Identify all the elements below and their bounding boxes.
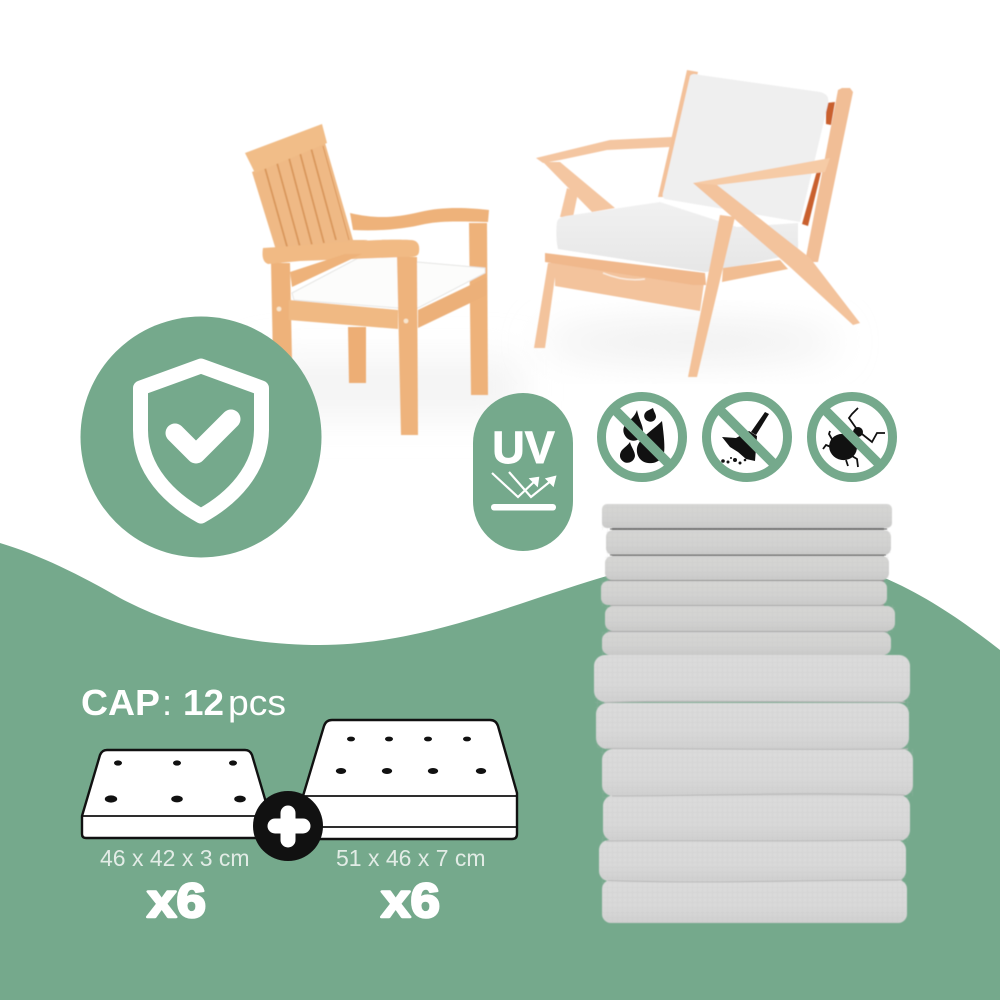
icon: no insects: [812, 396, 892, 478]
tufting dots: [336, 737, 486, 774]
size label right: 51 x 46 x 7 cm: [336, 845, 486, 871]
near armrest: [263, 240, 419, 264]
UV protection badge: [473, 393, 573, 551]
far armrest: [350, 208, 489, 230]
chair: teak armchair with white seat pad: [245, 124, 489, 435]
thick cushions: [594, 655, 913, 923]
back legs and rear posts: [271, 223, 488, 395]
icon: no water: [602, 396, 682, 478]
UV text: UV: [492, 422, 555, 473]
heading: :: [162, 682, 172, 723]
right diagonal support and rear leg: [693, 183, 860, 325]
icon: reflected rays: [492, 472, 555, 497]
quantity left: x6: [147, 875, 206, 928]
surface bar: [491, 504, 556, 510]
seat cushion: [556, 202, 798, 272]
heading: 12: [183, 682, 224, 723]
badge circle: [80, 316, 322, 558]
back cushion: [663, 74, 828, 222]
green wave background: [0, 543, 1000, 1000]
chair: lounge chair with grey-white cushions: [534, 70, 860, 377]
heading: CAP: [81, 682, 160, 723]
icon: plus: [253, 791, 323, 861]
quantity right: x6: [381, 875, 440, 928]
seam lines: [604, 529, 908, 882]
size label left: 46 x 42 x 3 cm: [100, 845, 250, 871]
diagram: large cushion: [300, 720, 517, 839]
post bolts: [277, 307, 408, 323]
diagram: small cushion: [82, 750, 270, 838]
near front post: [397, 257, 418, 435]
cushion stack: [594, 504, 913, 923]
stack backing: [612, 520, 884, 660]
seat frame: [545, 253, 788, 285]
diagonal arm support: [290, 254, 362, 287]
backrest slats: [252, 143, 368, 263]
pill: [473, 393, 573, 551]
tufting dots: [105, 760, 246, 803]
seat rails: [289, 277, 487, 329]
backrest top rail: [245, 124, 327, 173]
thin cushions: [601, 504, 895, 655]
icon: shield with check mark: [140, 366, 262, 516]
fabric weave: [594, 504, 913, 923]
heading: [81, 682, 286, 723]
floor shadows: [260, 328, 840, 415]
back frame right rail: [805, 88, 853, 262]
left arm and support: [536, 137, 672, 217]
lower under-seat panel and legs: [534, 260, 704, 348]
shield badge: [80, 316, 322, 558]
icon: no dust: [706, 396, 788, 478]
heading: pcs: [228, 682, 286, 723]
back frame left rail: [658, 70, 698, 197]
orange strap: [802, 102, 835, 226]
seat pad: [292, 255, 485, 308]
front right leg: [688, 215, 735, 377]
right arm: [693, 158, 830, 186]
